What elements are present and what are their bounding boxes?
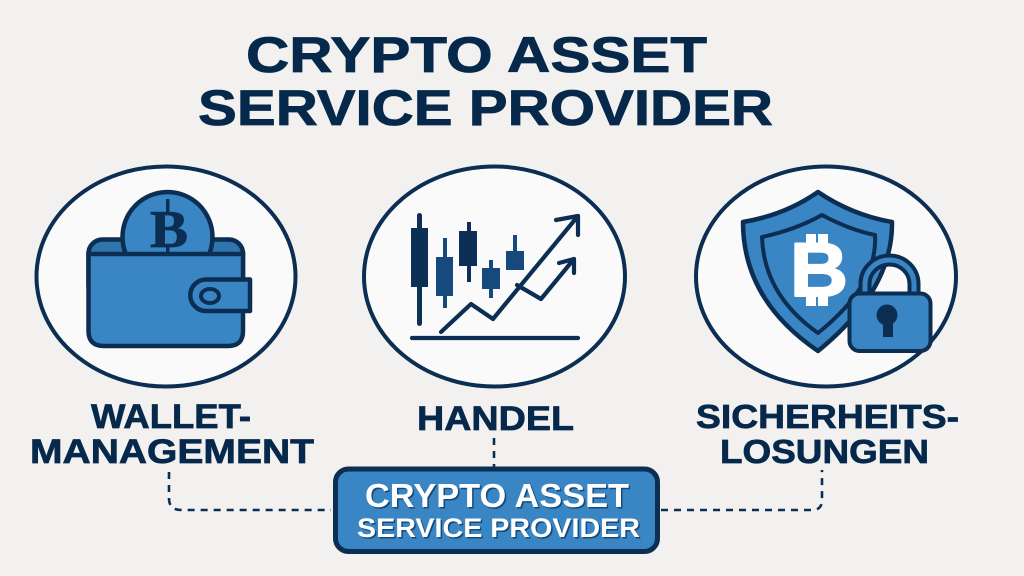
box text: SERVICE PROVIDER: [357, 513, 640, 543]
circle: wallet: [36, 166, 296, 386]
label: wallet-management: MANAGEMENT: [30, 433, 314, 471]
box text shadow: SERVICE PROVIDER: [358, 514, 642, 544]
label: sicherheits-losungen: LOSUNGEN: [720, 433, 929, 470]
icon: wallet with bitcoin: [88, 192, 250, 346]
box text shadow: CRYPTO ASSET: [366, 478, 630, 516]
title: [198, 27, 773, 136]
circle: security: [696, 166, 956, 386]
box text: CRYPTO ASSET: [365, 477, 629, 514]
icon: wallet with bitcoin: B: [150, 201, 188, 259]
label: sicherheits-losungen: [696, 398, 959, 470]
panel: handel: [364, 166, 625, 438]
title: SERVICE PROVIDER: [198, 80, 773, 136]
label: sicherheits-losungen: SICHERHEITS-: [696, 398, 959, 435]
icon: padlock: [850, 260, 930, 351]
panel: sicherheitslosungen: [696, 166, 959, 470]
label: wallet-management: WALLET-: [91, 398, 251, 436]
label: handel: HANDEL: [417, 400, 574, 438]
circle: handel: [364, 166, 625, 386]
icon: shield with bitcoin: B: [790, 228, 848, 313]
chart: rising arrows: [412, 216, 578, 338]
box text shadow: [358, 478, 642, 544]
connector: dashed lines: [169, 438, 822, 510]
panel: wallet management: [30, 166, 314, 471]
callout: central box: [336, 469, 658, 552]
icon: shield with bitcoin: [743, 192, 892, 351]
chart: candlesticks: [411, 213, 524, 326]
title: CRYPTO ASSET: [246, 27, 707, 83]
box text: [357, 477, 640, 543]
label: wallet-management: [30, 398, 314, 471]
